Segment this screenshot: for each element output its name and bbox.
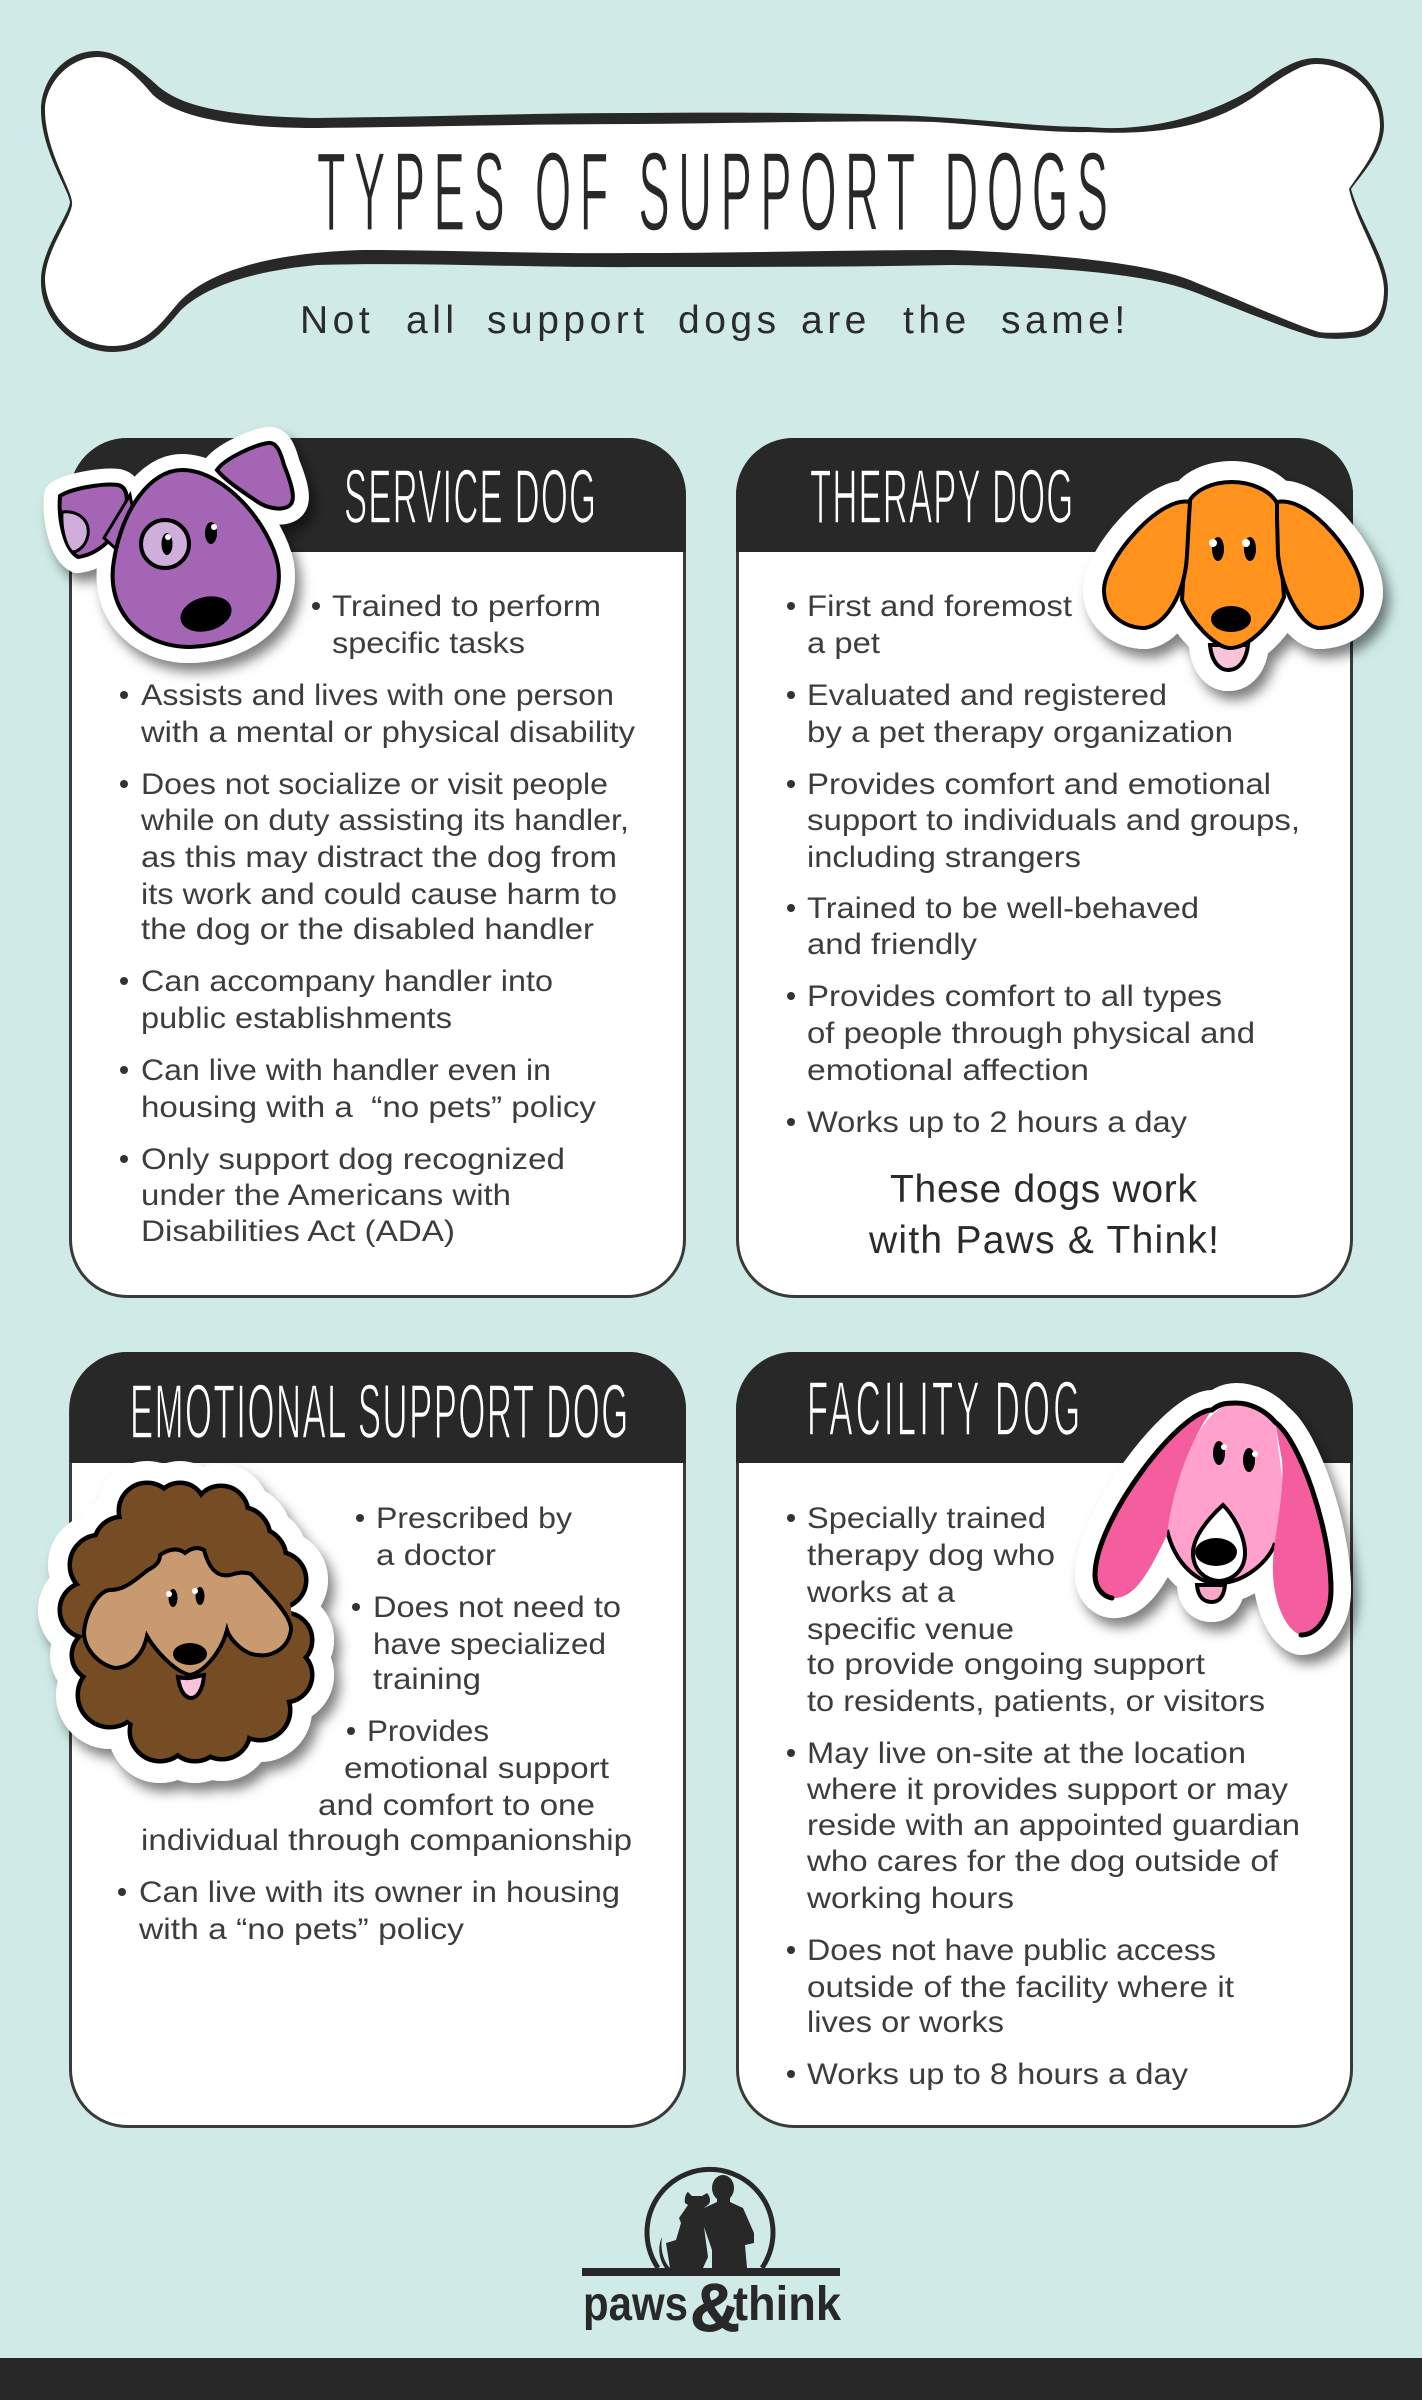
text: emotional support dog bullets: Can live with its owner in housing [139, 1876, 620, 1909]
subtitle: are [801, 299, 886, 342]
text: service dog bullets: its work and could cause harm to [141, 878, 617, 911]
text: service dog bullets: as this may distract the dog from [141, 841, 617, 874]
text: therapy dog bullets: First and foremost [807, 590, 1073, 623]
logo: paws & think [582, 2169, 841, 2346]
text: service dog bullets: public establishments [141, 1002, 452, 1035]
subtitle: all [406, 299, 474, 342]
handwritten note [868, 1168, 1219, 1262]
text: therapy dog bullets: Evaluated and registered [807, 679, 1167, 712]
subtitle: support [487, 299, 664, 342]
panel: service dog [60, 438, 686, 1296]
footer bar [0, 2358, 1422, 2400]
text: facility dog bullets [787, 1502, 1300, 2091]
panel: facility dog [736, 1352, 1353, 2126]
logo wordmark: & [690, 2270, 740, 2346]
text: service dog bullets [120, 590, 635, 1248]
text: service dog bullets: while on duty assisting its handler, [140, 804, 629, 837]
text: service dog bullets: Can accompany handler into [141, 965, 553, 998]
text: emotional support dog bullets: training [373, 1663, 481, 1696]
logo wordmark: think [733, 2278, 841, 2331]
text: facility dog bullets: who cares for the dog outside of [806, 1845, 1279, 1878]
text: facility dog bullets: therapy dog who [807, 1539, 1055, 1572]
logo silhouette: dog [659, 2192, 710, 2268]
subtitle: same! [1001, 299, 1130, 342]
text: service dog bullets: Disabilities Act (ADA) [141, 1215, 455, 1248]
logo wordmark [583, 2270, 841, 2346]
logo wordmark: paws [583, 2278, 688, 2331]
text: emotional support dog bullets: Prescribed by [376, 1502, 572, 1535]
text: therapy dog bullets: including strangers [807, 841, 1081, 874]
subtitle: the [903, 299, 986, 342]
text: emotional support dog bullets: Does not need to [373, 1591, 621, 1624]
text: therapy dog bullets: a pet [807, 627, 881, 660]
text: facility dog bullets: working hours [806, 1882, 1014, 1915]
text: emotional support dog bullets: individual through companionship [141, 1824, 632, 1857]
text: service dog bullets: under the Americans with [141, 1179, 511, 1212]
title: TYPES OF SUPPORT DOGS [317, 131, 1108, 255]
text: therapy dog bullets: of people through physical and [807, 1017, 1255, 1050]
text: emotional support dog bullets: a doctor [376, 1539, 496, 1572]
handwritten note: with Paws & Think! [868, 1219, 1219, 1262]
text: facility dog bullets: to residents, patients, or visitors [807, 1685, 1265, 1718]
panel: therapy dog [736, 438, 1362, 1296]
text: emotional support dog bullets: emotional support [344, 1752, 610, 1785]
text: facility dog bullets: to provide ongoing support [807, 1648, 1206, 1681]
text: facility dog bullets: lives or works [807, 2006, 1004, 2039]
heading: service dog: SERVICE DOG [344, 453, 596, 540]
text: service dog bullets: Can live with handler even in [141, 1054, 551, 1087]
icon: orange dog [1104, 482, 1362, 670]
text: therapy dog bullets: support to individuals and groups, [807, 804, 1300, 837]
bone banner [41, 51, 1388, 352]
text: facility dog bullets: outside of the facility where it [807, 1971, 1235, 2004]
text: emotional support dog bullets: and comfort to one [318, 1789, 595, 1822]
text: emotional support dog bullets: with a “no pets” policy [138, 1913, 464, 1946]
text: service dog bullets: specific tasks [332, 627, 525, 660]
text: therapy dog bullets: emotional affection [807, 1054, 1089, 1087]
text: facility dog bullets: May live on-site at the location [807, 1737, 1246, 1770]
text: service dog bullets: the dog or the disabled handler [141, 913, 594, 946]
subtitle: dogs [678, 299, 796, 342]
text: therapy dog bullets: Works up to 2 hours a day [807, 1106, 1187, 1139]
icon: pink dog [1095, 1403, 1331, 1635]
heading: facility dog: FACILITY DOG [807, 1365, 1080, 1452]
text: therapy dog bullets: by a pet therapy organization [807, 716, 1233, 749]
logo band [582, 2268, 840, 2276]
text: service dog bullets: Trained to perform [332, 590, 601, 623]
text: emotional support dog bullets: Provides [367, 1715, 489, 1748]
heading: emotional support dog: EMOTIONAL SUPPORT DOG [130, 1368, 628, 1455]
text: emotional support dog bullets [118, 1502, 632, 1946]
text: therapy dog bullets: and friendly [807, 928, 977, 961]
text: facility dog bullets: Works up to 8 hours a day [807, 2058, 1188, 2091]
logo silhouette: person [704, 2175, 754, 2268]
text: facility dog bullets: Does not have public access [807, 1934, 1216, 1967]
handwritten note: These dogs work [890, 1168, 1198, 1211]
text: service dog bullets: Does not socialize or visit people [141, 768, 608, 801]
text: therapy dog bullets [787, 590, 1300, 1139]
text: facility dog bullets: where it provides support or may [806, 1773, 1288, 1806]
text: service dog bullets: Assists and lives with one person [141, 679, 614, 712]
panel: emotional support dog [60, 1352, 686, 2126]
text: facility dog bullets: reside with an appointed guardian [807, 1809, 1300, 1842]
text: therapy dog bullets: Provides comfort and emotional [807, 768, 1271, 801]
text: therapy dog bullets: Provides comfort to all types [807, 980, 1222, 1013]
heading: therapy dog: THERAPY DOG [810, 453, 1073, 540]
text: therapy dog bullets: Trained to be well-behaved [807, 892, 1199, 925]
text: facility dog bullets: specific venue [807, 1613, 1014, 1646]
text: emotional support dog bullets: have specialized [373, 1628, 606, 1661]
logo ring [647, 2169, 773, 2268]
text: service dog bullets: housing with a “no pets” policy [141, 1091, 596, 1124]
subtitle: Not [300, 299, 390, 342]
text: service dog bullets: with a mental or physical disability [140, 716, 635, 749]
text: facility dog bullets: works at a [806, 1576, 955, 1609]
icon: brown poodle [60, 1483, 312, 1761]
text: service dog bullets: Only support dog recognized [141, 1143, 565, 1176]
text: facility dog bullets: Specially trained [807, 1502, 1046, 1535]
icon: purple dog [60, 443, 293, 647]
